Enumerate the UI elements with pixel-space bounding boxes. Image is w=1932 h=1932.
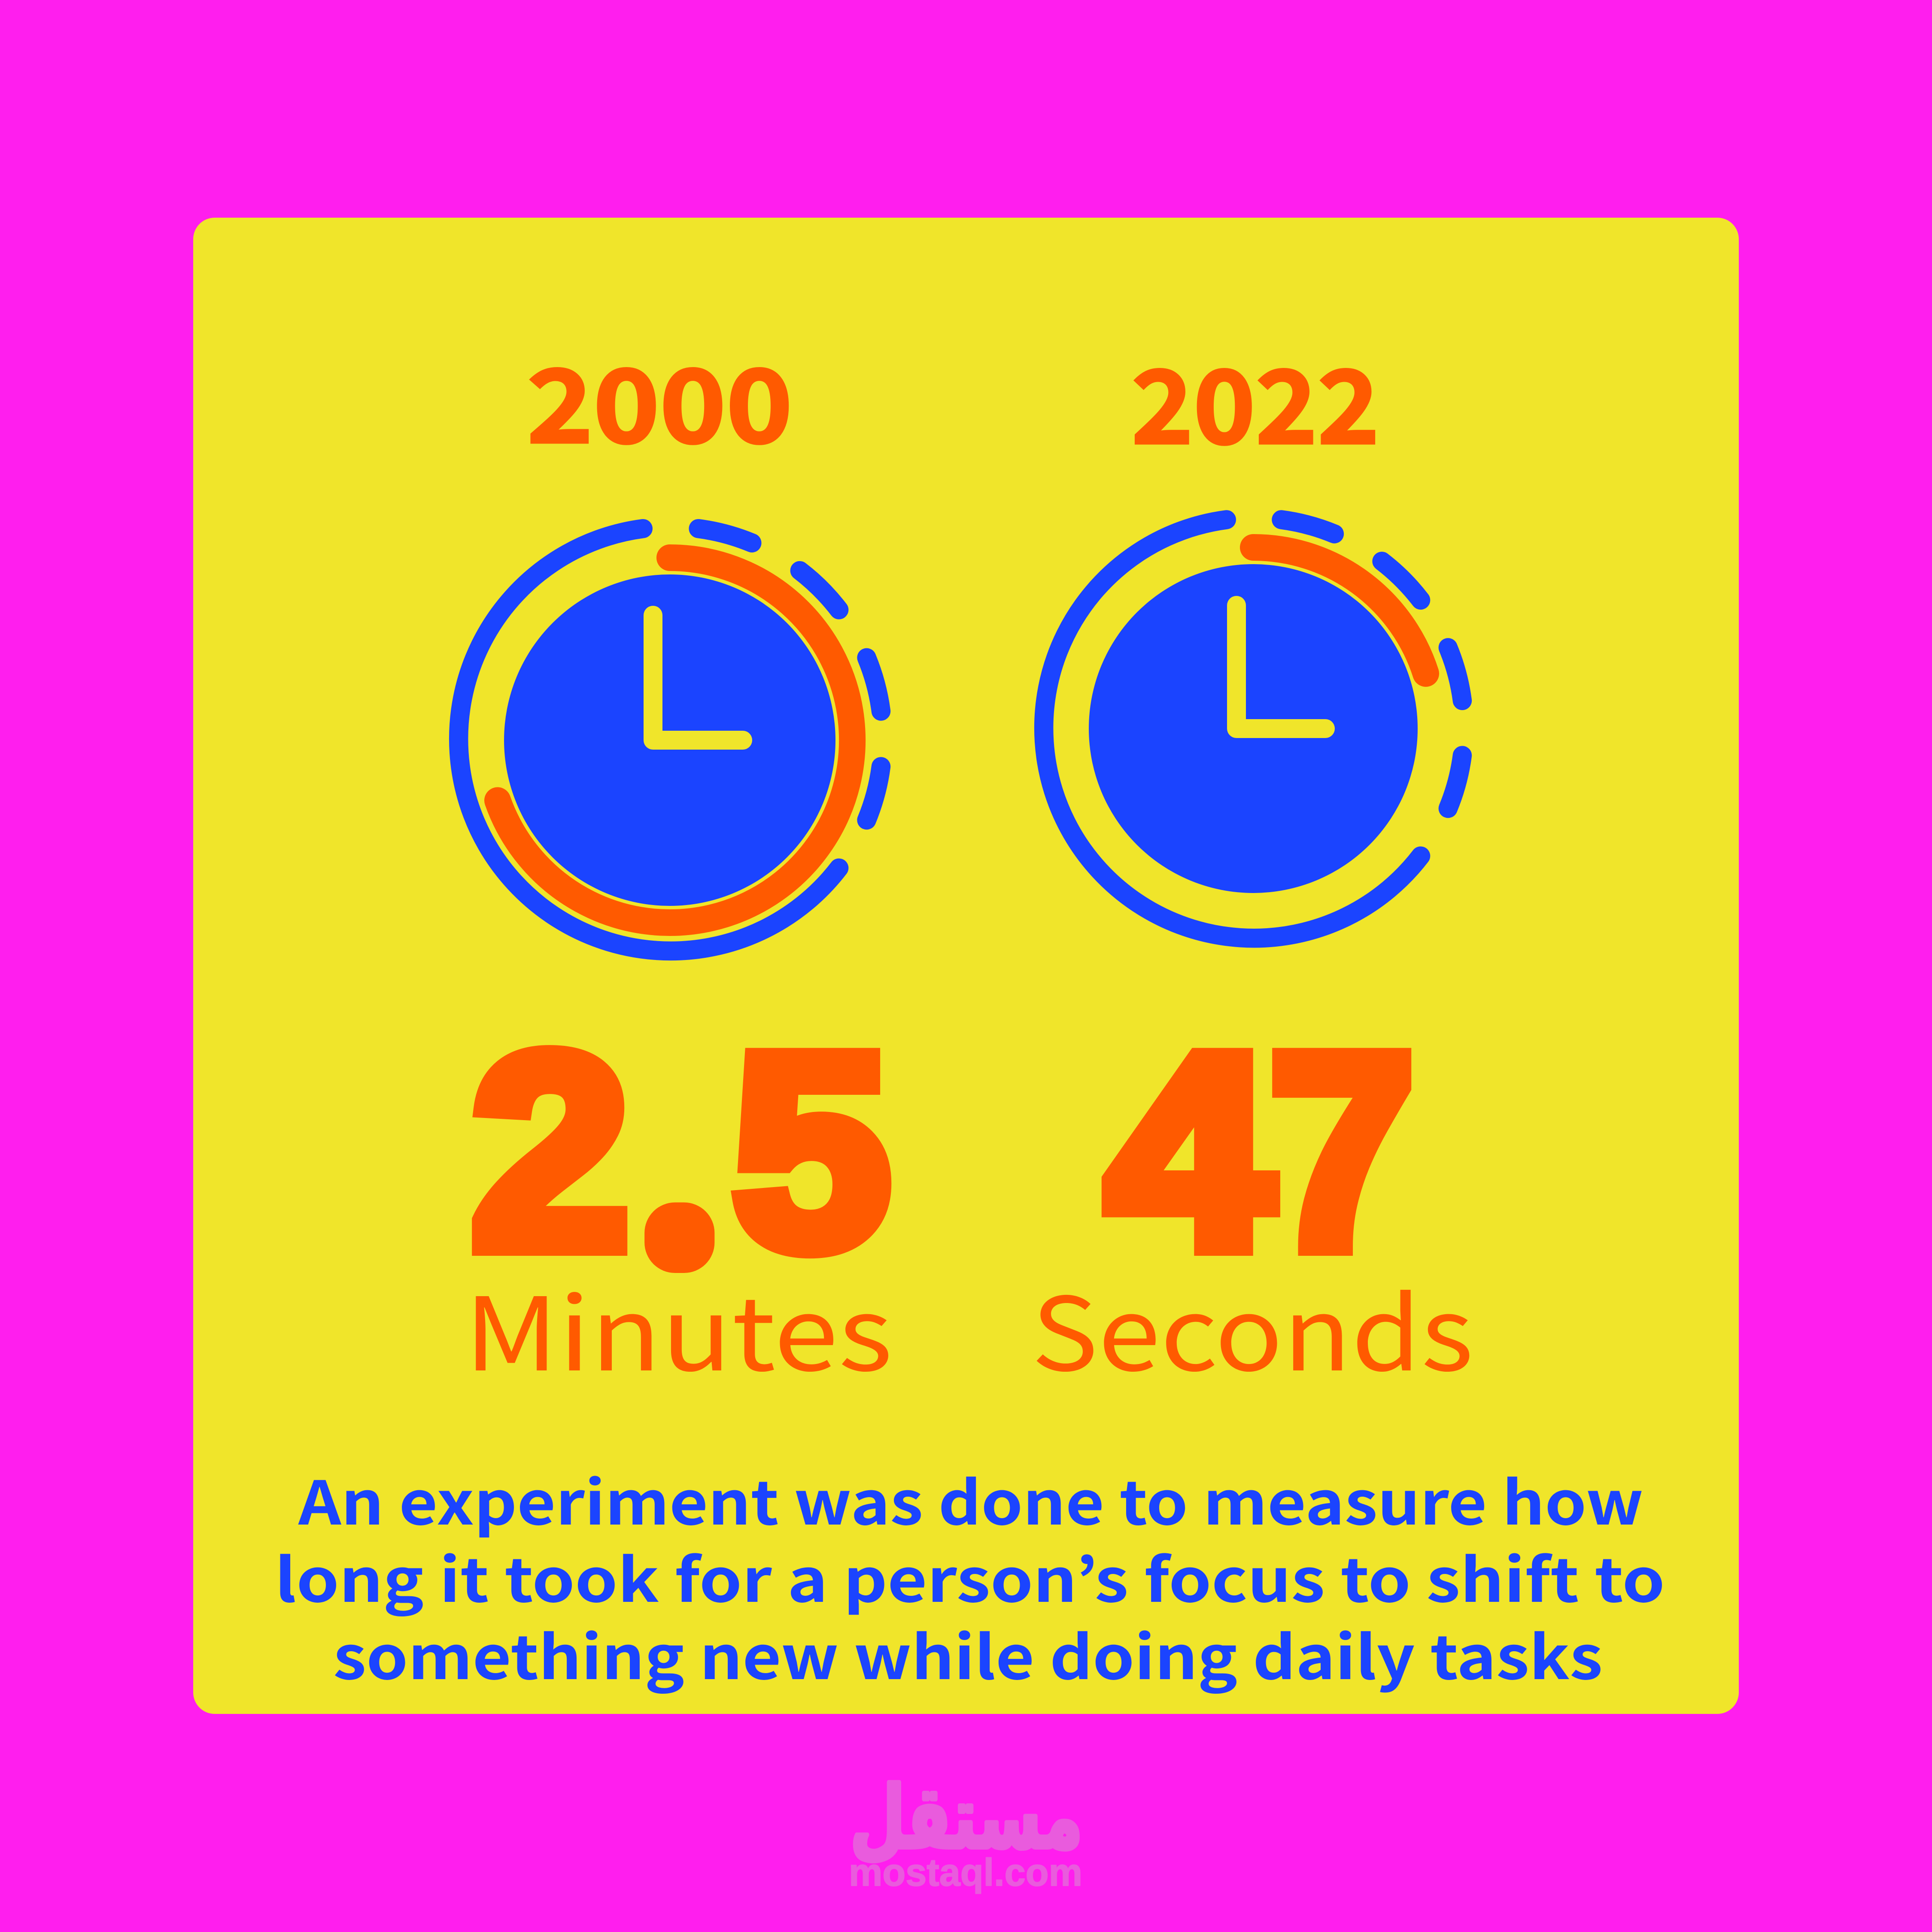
clock face	[1089, 564, 1418, 893]
logo: Arabic wordmark: مستقل	[850, 1768, 1083, 1868]
description text: An experiment was done to measure how	[298, 1455, 1643, 1542]
description text: long it took for a person’s focus to shift to	[275, 1533, 1665, 1619]
orange progress arc	[498, 558, 852, 923]
blue outer dashed ring	[1044, 519, 1462, 938]
orange progress arc	[1253, 547, 1426, 674]
big number: 2.5	[472, 998, 890, 1305]
label: Minutes: Minutes	[464, 1253, 893, 1400]
heading: year 2000: 2000	[527, 325, 793, 472]
description text	[275, 1455, 1665, 1697]
big number: 2.5: 5	[733, 998, 890, 1305]
logo: mostaql.com: mostaql.com	[849, 1851, 1082, 1894]
big number: 2.5: 2	[472, 998, 629, 1305]
watermark logo	[849, 1768, 1083, 1894]
icon: clock 2022	[1044, 519, 1462, 938]
heading: year 2022: 2022	[1131, 326, 1379, 473]
big number: 2.5: .	[671, 1184, 689, 1256]
big number: 47	[1107, 998, 1414, 1305]
label: Seconds: Seconds	[1031, 1253, 1473, 1400]
clock face	[504, 574, 835, 906]
description text: something new while doing daily tasks	[333, 1610, 1603, 1697]
clock hands	[653, 615, 743, 740]
panel: yellow card	[193, 218, 1739, 1714]
icon: clock 2000	[459, 529, 881, 951]
blue outer dashed ring	[459, 529, 881, 951]
big number: 47: 7	[1270, 998, 1414, 1305]
clock hands	[1236, 605, 1325, 729]
big number: 47: 4	[1107, 998, 1273, 1305]
